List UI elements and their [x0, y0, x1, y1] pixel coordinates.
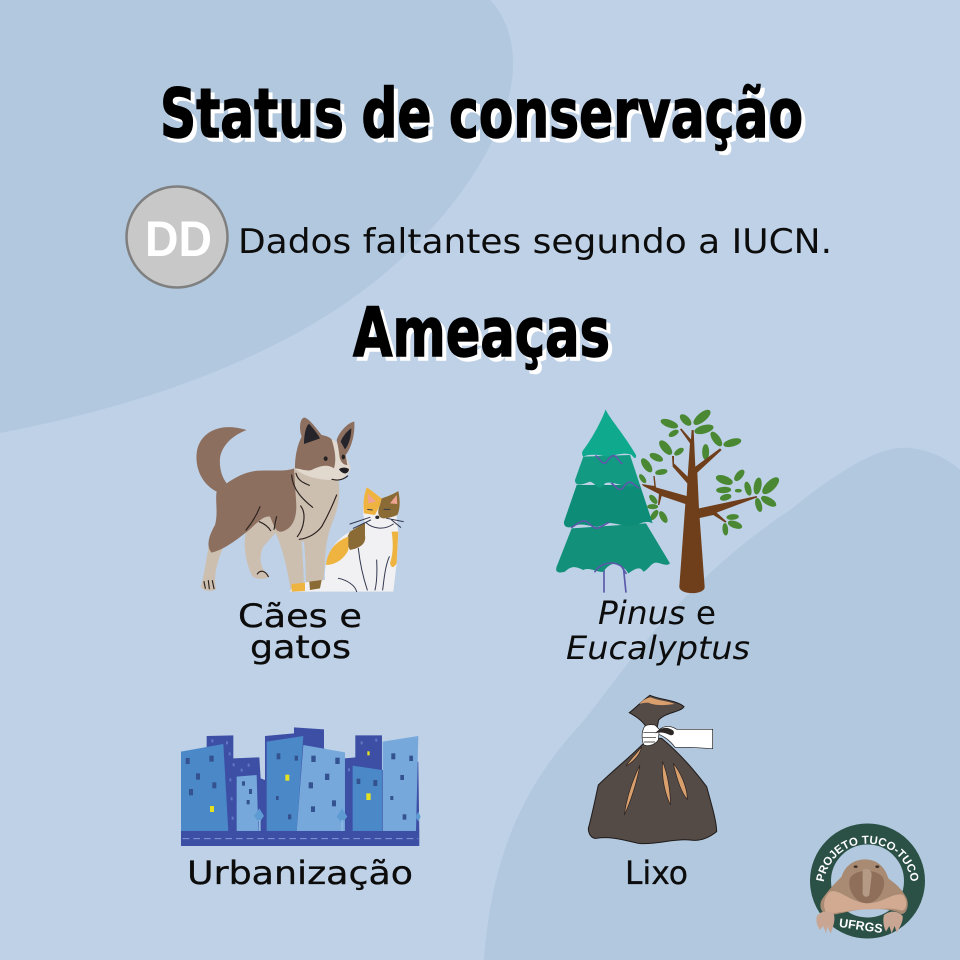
label: urbanization: Urbanização: [187, 854, 413, 892]
logo text: UFRGS: UFRGS: [838, 916, 883, 936]
bag folds: [624, 747, 687, 815]
dog head: [295, 439, 351, 480]
icon: city buildings: [181, 727, 421, 846]
label: pinus and eucalyptus: Pinus e: [598, 594, 716, 632]
street trees: [254, 808, 421, 823]
badge: DD conservation status: [126, 186, 228, 288]
background blob: bottom right: [484, 448, 960, 960]
label: dogs and cats: gatos: [250, 628, 351, 666]
tree trunk and branches: [642, 428, 757, 593]
bag neck: [629, 695, 684, 733]
road: [181, 831, 419, 846]
background blob: top left: [0, 0, 513, 433]
label: dogs and cats: Cães e: [238, 597, 362, 635]
tuco-tuco animal: [816, 859, 908, 933]
windows: [186, 753, 413, 820]
front buildings: [181, 736, 382, 832]
icon: trash bag held by hand: [588, 695, 717, 844]
cat body: [290, 487, 400, 592]
logo: Projeto Tuco-Tuco UFRGS: [810, 824, 925, 938]
cat lines: [338, 509, 403, 592]
heading: threats: Ameaças: [357, 298, 614, 377]
dog tail and body: [196, 427, 296, 553]
icon: dog and cat: [196, 418, 403, 592]
back buildings: [207, 727, 419, 832]
logo: Projeto Tuco-Tuco UFRGS: PROJETO TUCO-TUCO: [816, 836, 918, 882]
bag body: [588, 738, 717, 844]
heading: threats: Ameaças: [353, 294, 610, 373]
dog back legs: [201, 513, 277, 591]
label: pinus and eucalyptus: Eucalyptus: [566, 629, 750, 667]
icon: pine and eucalyptus trees: [556, 408, 781, 593]
pine trunk lines: [604, 567, 626, 593]
cat patches: [363, 487, 382, 515]
text: status description: Dados faltantes segundo a IUCN.: [238, 222, 832, 262]
pine tiers: [556, 523, 670, 573]
badge: DD conservation status: DD: [145, 211, 212, 267]
dog front body: [275, 468, 339, 591]
pine purple lines: [572, 456, 639, 573]
label: trash: Lixo: [625, 854, 688, 892]
leaves behind pine: [638, 408, 781, 535]
hand and arm: [656, 726, 713, 749]
